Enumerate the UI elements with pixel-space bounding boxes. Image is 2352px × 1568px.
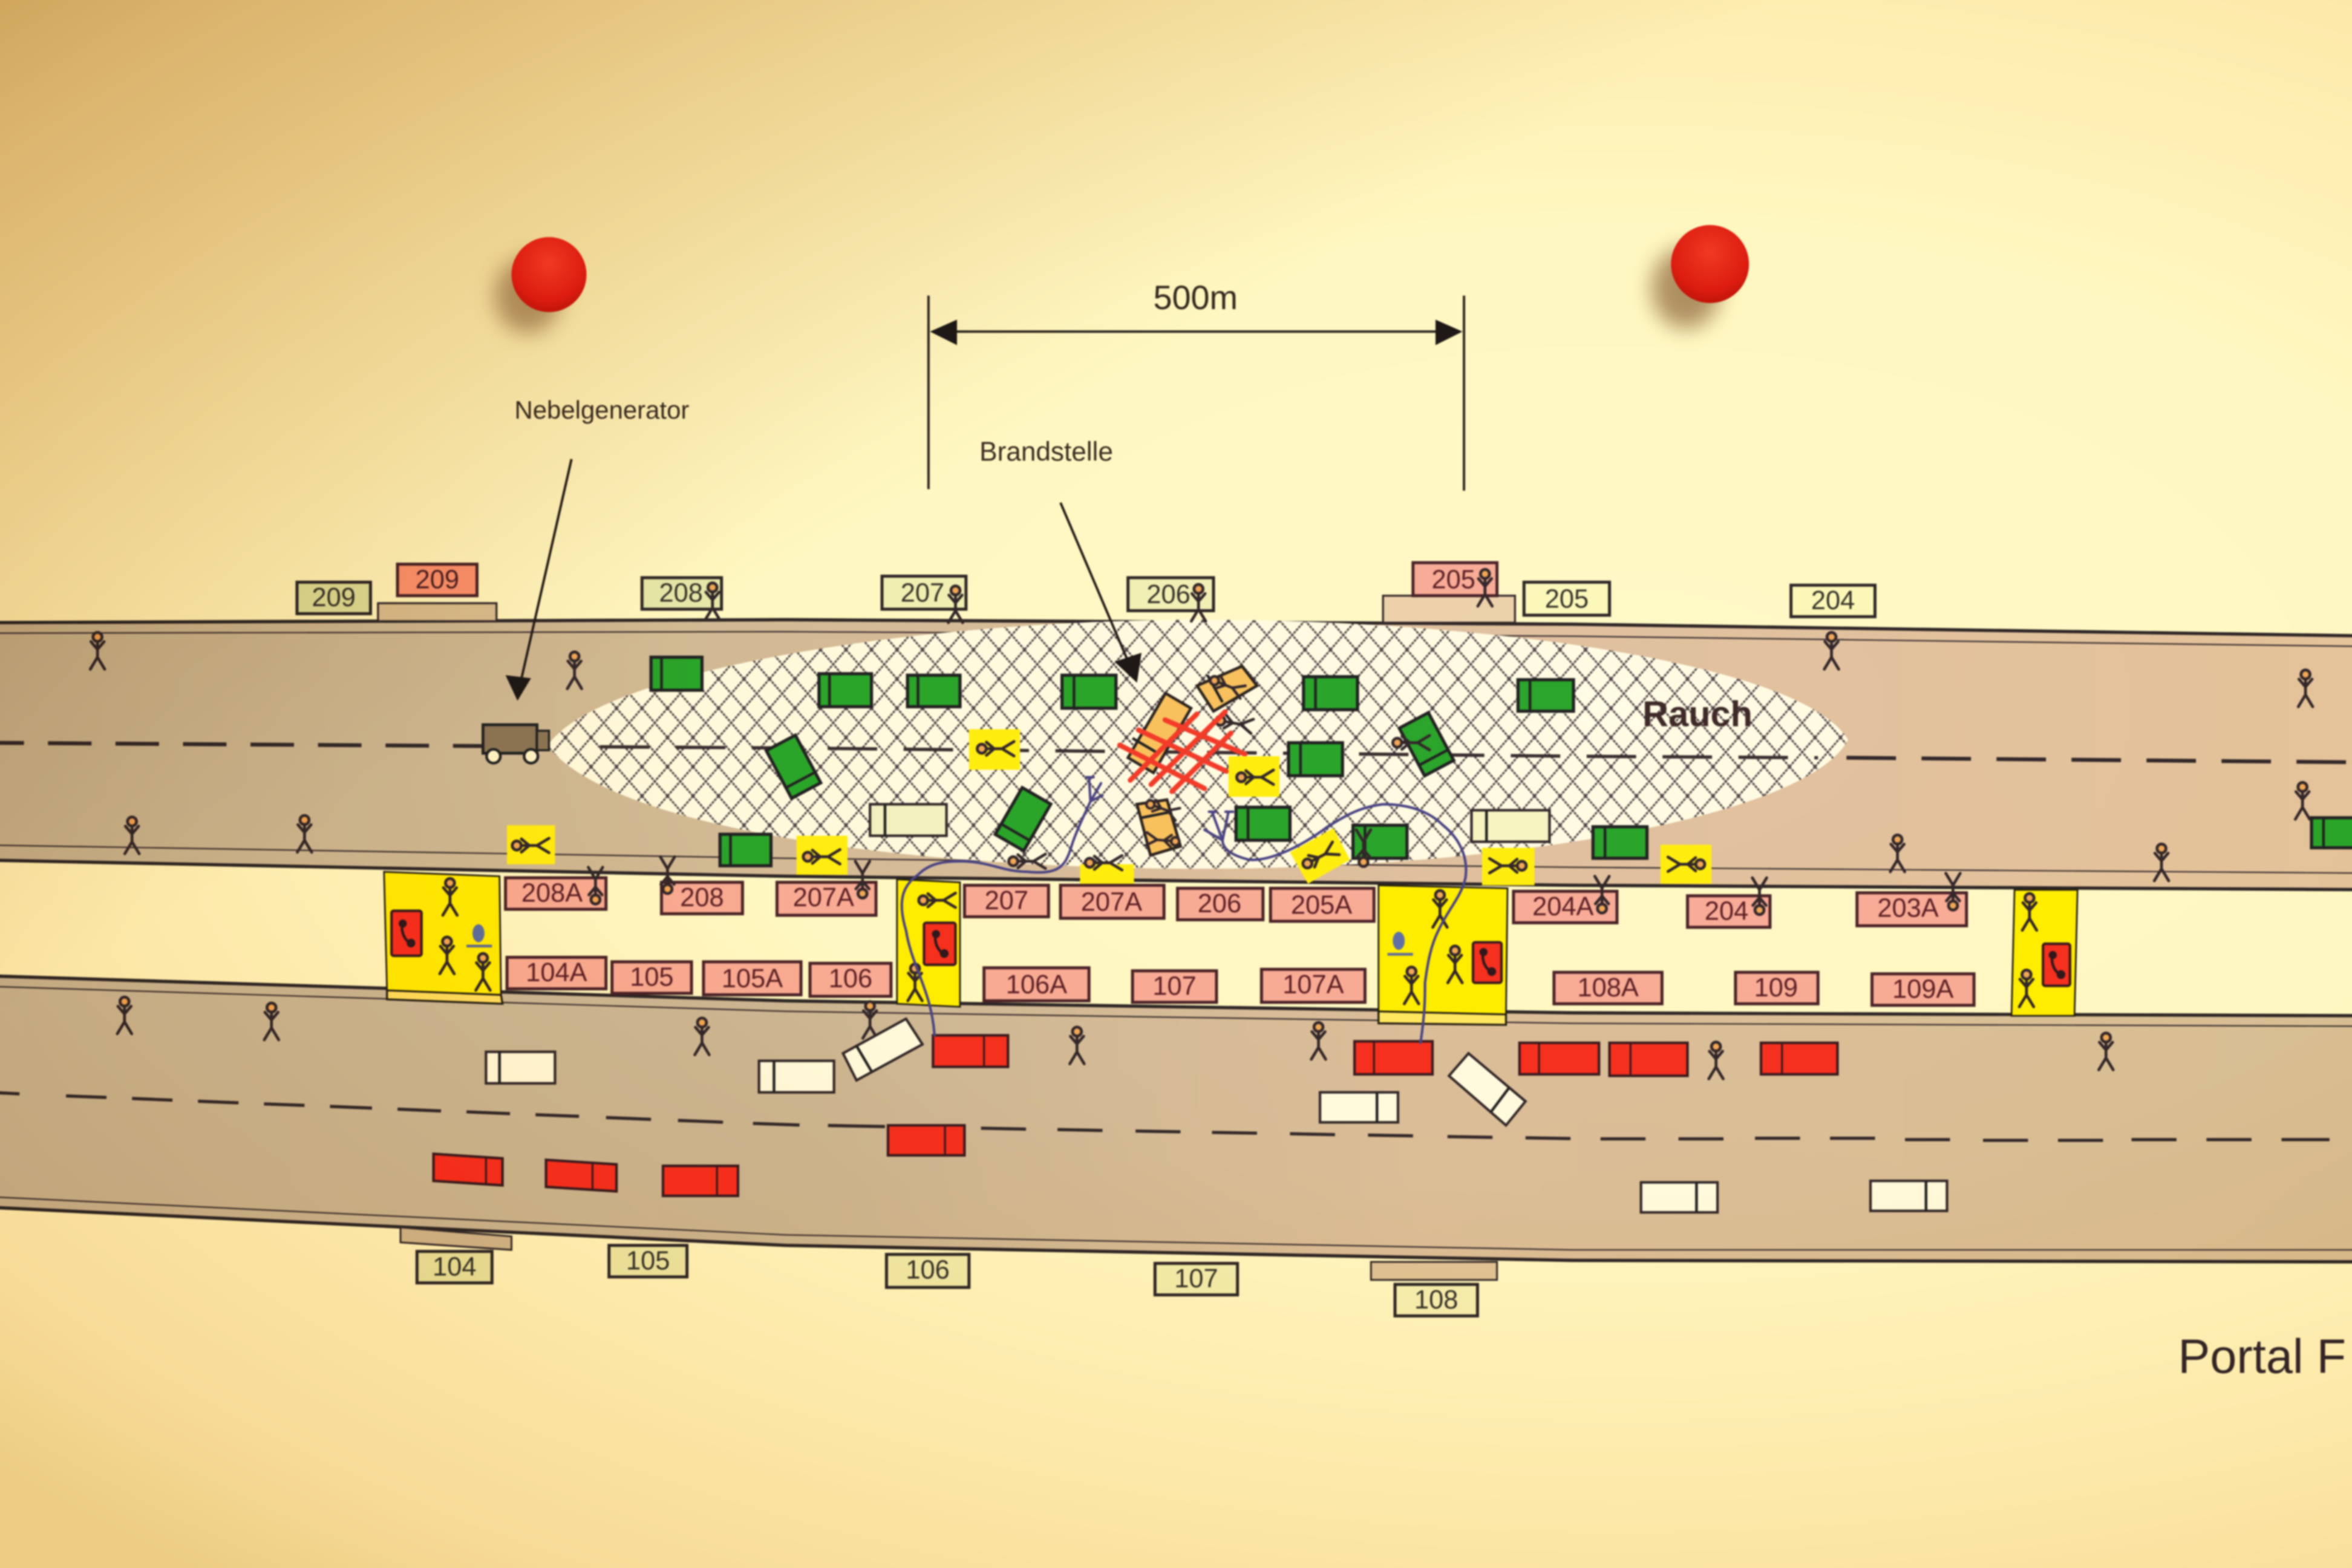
person [695, 1018, 709, 1055]
person [705, 583, 720, 619]
magnet pin right [1671, 225, 1749, 303]
green truck 1 [651, 657, 702, 690]
sign 108A [1554, 972, 1662, 1004]
sign 105 [612, 962, 691, 993]
person [588, 867, 603, 904]
cross passage D [2011, 890, 2077, 1016]
sign 207 [964, 885, 1048, 917]
pale truck 1 [870, 804, 947, 836]
sign 108A: 108A [1577, 973, 1639, 1002]
smoke generator truck [483, 725, 549, 763]
panel: upper tunnel tube [0, 619, 2352, 890]
orange truck top [1197, 666, 1257, 711]
centre line upper tube, left part [0, 743, 547, 746]
people upside down and lying [588, 736, 1960, 915]
person on orange bottom [1146, 832, 1180, 848]
person [949, 586, 962, 622]
label 108: 108 [1414, 1285, 1458, 1315]
sign 205A [1270, 888, 1374, 921]
person B lying [919, 893, 955, 907]
person on orange bottom head [1145, 797, 1180, 820]
caption Nebelgenerator: Nebelgenerator [514, 396, 689, 424]
person [1009, 854, 1045, 869]
lay-by lower left [400, 1227, 512, 1250]
person [2154, 844, 2169, 881]
sign 105A: 105A [722, 964, 783, 993]
lay-by upper left [378, 603, 497, 621]
sign 106: 106 [829, 964, 872, 993]
phone A [391, 911, 422, 956]
label 205 red: 205 [1432, 565, 1475, 594]
person [1890, 835, 1905, 872]
person A3 [476, 953, 490, 990]
green truck 4 [1062, 675, 1116, 708]
sign 208: 208 [680, 883, 724, 912]
burning truck main [1128, 693, 1191, 773]
labels above upper tube [297, 563, 1875, 616]
person [264, 1003, 279, 1040]
green truck 3 [907, 675, 960, 707]
phone D [2043, 944, 2070, 986]
sign 206: 206 [1198, 889, 1241, 918]
pale cars in the smoke [870, 804, 1549, 841]
red truck 3 [434, 1154, 503, 1185]
red truck 7 [1520, 1043, 1599, 1074]
green truck 11 [720, 834, 771, 866]
sign 205A: 205A [1291, 891, 1352, 920]
person [1824, 632, 1838, 669]
label 209 green [297, 582, 370, 613]
tag 4 [1229, 756, 1279, 797]
sign 203A: 203A [1877, 893, 1939, 923]
sign 208 [661, 882, 742, 914]
person [2099, 1033, 2113, 1070]
sign 204: 204 [1705, 897, 1748, 926]
sign 107 [1132, 971, 1217, 1002]
green truck rotated 3 [1399, 713, 1454, 776]
sign 207A: 207A [793, 883, 854, 912]
phone C [1473, 942, 1501, 983]
person C3 [1404, 967, 1419, 1004]
person C2 [1448, 946, 1462, 983]
sign 207: 207 [985, 886, 1028, 915]
person A1 [443, 878, 457, 915]
sign 109: 109 [1754, 973, 1798, 1002]
arrow to smoke generator [506, 459, 572, 701]
centre line upper tube, right part [1846, 758, 2352, 762]
green truck 6 [1289, 743, 1342, 776]
red truck 6 [1354, 1041, 1432, 1074]
tag 2 [797, 836, 848, 875]
labels upper row of cross-passage signs [506, 878, 1967, 927]
person A2 [440, 937, 454, 974]
dimension value: 500m [1153, 278, 1238, 316]
person C1 [1433, 890, 1447, 927]
sign 204A [1514, 891, 1617, 923]
lay-by upper right [1383, 596, 1515, 622]
red truck 9 [1761, 1043, 1838, 1074]
label 206 [1128, 578, 1214, 611]
label 204 [1791, 585, 1875, 616]
panel: lower tunnel tube [0, 975, 2352, 1262]
tag 6 rotated [1290, 828, 1350, 884]
sign 207A [777, 882, 876, 915]
magnet pin left [512, 237, 587, 312]
person [1753, 878, 1766, 915]
sign 109 [1736, 972, 1818, 1004]
label 107: 107 [1174, 1264, 1218, 1293]
label 105: 105 [626, 1246, 670, 1275]
sign 208A [506, 878, 606, 909]
labels below lower tube [417, 1246, 1477, 1316]
pin shadow left [495, 258, 561, 333]
people standing [90, 569, 2313, 1079]
red truck 2 [888, 1125, 964, 1155]
blue post A [466, 924, 492, 946]
red truck 8 [1610, 1043, 1688, 1076]
dimension marker 500m [929, 278, 1464, 491]
sign 105: 105 [630, 963, 674, 992]
cross passage A [384, 872, 503, 1004]
purple walker icon left [1086, 777, 1102, 802]
caption Brandstelle: Brandstelle [979, 437, 1113, 466]
person [1709, 1042, 1723, 1079]
tag 3 [969, 729, 1020, 769]
label 107 [1155, 1263, 1238, 1295]
white truck 1 [486, 1052, 555, 1083]
red truck 4 [546, 1160, 616, 1191]
red truck 1 [933, 1035, 1008, 1067]
phone B [924, 923, 955, 965]
sign 107: 107 [1152, 972, 1197, 1001]
sign 208A: 208A [521, 879, 583, 908]
green truck 10 [1593, 827, 1647, 858]
white truck 5 [1870, 1181, 1947, 1211]
person [1191, 584, 1206, 621]
sign 105A [704, 962, 801, 995]
lay-by lower right [1371, 1262, 1497, 1280]
centre line upper tube, in smoke [600, 746, 1818, 758]
red truck 5 [663, 1166, 738, 1196]
centre line lower tube [0, 1093, 2330, 1140]
label 105 [609, 1246, 687, 1277]
label 104: 104 [433, 1252, 476, 1281]
person [297, 815, 312, 852]
person [855, 861, 870, 898]
sign 107A: 107A [1282, 970, 1344, 999]
white truck 4 [1641, 1183, 1717, 1212]
green truck rotated 2 [995, 788, 1051, 851]
cross passage B [897, 879, 960, 1007]
tag 5 partly hidden [1080, 855, 1134, 884]
sign 207A second: 207A [1081, 888, 1142, 917]
green vehicles in the upper tube [651, 657, 2352, 866]
burning vehicles [1120, 666, 1257, 855]
tag 1 [507, 825, 555, 864]
green truck 12 [2311, 818, 2352, 848]
person [1393, 736, 1429, 750]
sign 106A [984, 968, 1089, 1001]
sign 104A [507, 957, 606, 989]
person [117, 997, 132, 1034]
person [567, 652, 582, 688]
label 204: 204 [1811, 586, 1855, 615]
sign 206 [1177, 888, 1263, 920]
escape route right, purple [1204, 804, 1466, 1043]
person D2 [2019, 970, 2034, 1007]
person [863, 1002, 877, 1038]
person [1356, 830, 1371, 866]
green truck 7 [1518, 680, 1573, 711]
green truck 8 [1236, 807, 1290, 840]
label 206: 206 [1146, 580, 1191, 609]
person [1946, 874, 1960, 910]
yellow casualty tags [507, 729, 1711, 885]
sign 104A: 104A [526, 958, 587, 987]
sign 204A: 204A [1532, 892, 1593, 921]
label 207: 207 [901, 579, 944, 608]
sign 109A: 109A [1892, 975, 1954, 1004]
green truck rotated 1 [766, 735, 821, 799]
sign 109A [1872, 974, 1974, 1005]
cross passage C [1379, 885, 1508, 1025]
green truck 5 [1304, 677, 1357, 710]
person B standing [908, 964, 922, 1001]
person [90, 632, 105, 669]
sign 207A second [1060, 885, 1164, 918]
tag 7 [1482, 848, 1535, 885]
sign 203A [1857, 893, 1967, 926]
label 106 [886, 1255, 969, 1287]
pin shadow right [1651, 247, 1720, 328]
orange truck bottom [1137, 800, 1180, 855]
label 205 pale: 205 [1545, 585, 1589, 614]
label 207 [882, 576, 966, 609]
vehicles lower tube [434, 1019, 1947, 1212]
blue post C [1388, 932, 1413, 955]
label 205 pale [1524, 582, 1610, 615]
person D1 [2022, 893, 2037, 930]
label 104 [417, 1252, 492, 1283]
white truck 2 [759, 1061, 834, 1093]
fire hatch [1120, 712, 1245, 791]
person [2298, 670, 2313, 707]
person [661, 857, 675, 893]
person [1070, 1027, 1084, 1064]
person [125, 817, 139, 854]
green truck 9 [1353, 825, 1407, 858]
white truck 3 [1320, 1093, 1398, 1122]
smoke area with lattice [547, 619, 1848, 869]
pale truck 2 [1471, 810, 1549, 841]
person [1595, 877, 1609, 913]
sign 106 [810, 963, 891, 996]
green truck 2 [819, 674, 872, 707]
label 208: 208 [659, 579, 703, 608]
labels lower row of cross-passage signs [507, 957, 1974, 1005]
person [1312, 1022, 1325, 1059]
white truck rotated 1 [843, 1019, 923, 1080]
purple walker icon right [1204, 812, 1233, 840]
tag 8 [1661, 844, 1711, 884]
arrow to fire site [1060, 503, 1142, 683]
person [1478, 569, 1492, 606]
label 209 red: 209 [416, 565, 459, 594]
label 205 red [1413, 563, 1497, 596]
escape route left, purple [902, 777, 1102, 1035]
sign 204 [1688, 896, 1770, 927]
sign 106A: 106A [1006, 970, 1067, 999]
person [2295, 783, 2310, 819]
person on orange top [1208, 673, 1246, 699]
smoke label Rauch: Rauch [1642, 693, 1753, 734]
portal label: Portal F [2178, 1330, 2346, 1383]
label 208 [642, 578, 722, 609]
label 108 [1395, 1284, 1477, 1316]
label 209 red [397, 564, 477, 596]
white truck rotated 2 [1449, 1053, 1526, 1125]
sign 107A [1261, 969, 1365, 1002]
person lying by fire [1215, 713, 1253, 733]
label 106: 106 [906, 1255, 950, 1284]
label 209 green: 209 [312, 583, 356, 612]
